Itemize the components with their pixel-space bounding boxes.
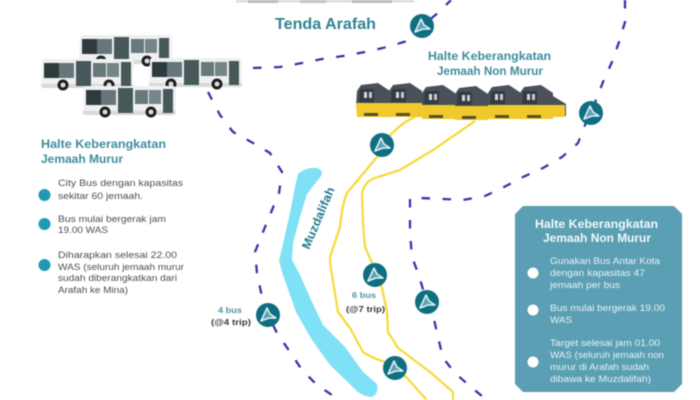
icon: direction marker: [363, 263, 387, 287]
label: 6 bus: 6 bus: [352, 290, 376, 300]
panel heading: Jemaah Non Murur: [543, 233, 652, 245]
item: bus type: jemaah per bus: [549, 280, 621, 290]
icon: direction marker: [370, 133, 394, 157]
heading: Halte Jemaah Murur: Jemaah Murur: [41, 154, 124, 166]
item: start time: [528, 303, 665, 325]
list: Murur details: Diharapkan selesai 22.00: [58, 250, 177, 260]
list: Murur details: sudah diberangkatkan dari: [58, 273, 177, 283]
icon: direction marker: [415, 290, 439, 314]
route: Murur dashed route to Tenda Arafah: [253, 0, 451, 68]
heading: Halte Non Murur map label: Jemaah Non Murur: [437, 66, 544, 78]
label: 4 bus: (@4 trip): [211, 317, 251, 327]
route: yellow Non Murur route 1: [330, 117, 427, 400]
river: Muzdalifah: [279, 168, 377, 397]
label: 4 bus: [211, 305, 251, 327]
item: target finish: [528, 338, 664, 384]
panel: Non Murur details: [515, 206, 682, 392]
list: Murur details: City Bus dengan kapasitas: [58, 178, 184, 188]
label: Muzdalifah: Muzdalifah: [299, 185, 338, 251]
list: Murur details: Bus mulai bergerak jam: [58, 214, 166, 224]
route: yellow Non Murur route 2: [362, 121, 475, 400]
icon: direction marker: [383, 356, 407, 380]
heading: Halte Non Murur map label: Halte Keberangkatan: [428, 51, 551, 63]
panel heading: Halte Keberangkatan: [535, 219, 658, 231]
icon: direction marker: [410, 14, 434, 38]
heading: Halte Non Murur map label: [428, 51, 551, 78]
item: target finish: WAS (seluruh jemaah non: [550, 350, 664, 360]
route: Murur dashed route to Muzdalifah: [208, 92, 345, 400]
route: Non Murur dashed return route: [410, 0, 625, 400]
item: bus type: Gunakan Bus Antar Kota: [550, 256, 660, 266]
heading: Halte Jemaah Murur: Halte Keberangkatan: [41, 139, 166, 151]
icon: direction marker: [579, 101, 603, 125]
item: target finish: Target selesai jam 01.00: [550, 338, 660, 348]
item: start time: Bus mulai bergerak 19.00: [550, 303, 665, 313]
label: 6 bus: (@7 trip): [346, 304, 385, 314]
item: target finish: dibawa ke Muzdalifah): [550, 374, 651, 384]
list: Murur details: Arafah ke Mina): [58, 285, 128, 295]
panel heading: [535, 219, 658, 245]
heading: Halte Jemaah Murur: [41, 139, 166, 166]
item: start time: WAS: [550, 315, 572, 325]
icon: Murur city buses: [41, 35, 242, 118]
heading: Tenda Arafah: Tenda Arafah: [275, 16, 376, 33]
list: Murur details: [38, 178, 184, 295]
list: Murur details: sekitar 60 jemaah.: [58, 191, 143, 201]
list: Murur details: WAS (seluruh jemaah murur: [58, 262, 184, 272]
label: 6 bus: [346, 290, 385, 314]
item: bus type: [528, 256, 660, 290]
icon: direction marker: [256, 303, 280, 327]
item: target finish: murur di Arafah sudah: [550, 362, 649, 372]
photo strip: Tenda Arafah: [236, 0, 414, 3]
list: Murur details: 19.00 WAS: [58, 225, 108, 235]
label: 4 bus: 4 bus: [218, 305, 242, 315]
icon: Non Murur yellow buses: [356, 83, 566, 120]
item: bus type: dengan kapasitas 47: [550, 268, 645, 278]
